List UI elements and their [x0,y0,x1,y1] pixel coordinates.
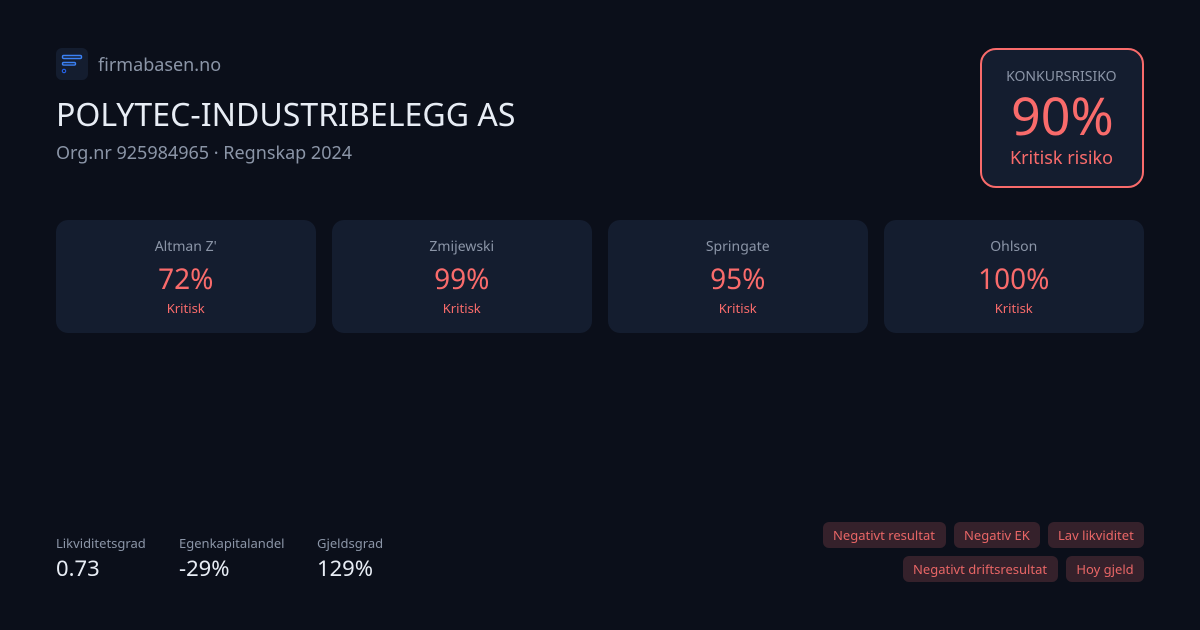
panel: Zmijewski: Zmijewski [429,237,494,256]
tag: Negativt driftsresultat: Negativt driftsresultat [913,560,1047,578]
panel: Ohlson: Kritisk [995,299,1033,317]
panel: Altman Z': 72% [158,260,213,298]
metric: Egenkapitalandel: -29% [179,553,230,583]
metric: Gjeldsgrad: 129% [317,553,373,583]
risk level: Kritisk risiko [1010,146,1113,170]
panel: Altman Z': Altman Z' [155,237,217,256]
tag: Negativ EK [954,522,1040,548]
tag: Negativt resultat [823,522,946,548]
panel: Altman Z' [56,220,316,333]
tag: Hoy gjeld [1066,556,1144,582]
metric: Egenkapitalandel [179,534,285,583]
tag: Negativ EK: Negativ EK [964,526,1030,544]
metric: Likviditetsgrad: Likviditetsgrad [56,534,146,552]
risk label: KONKURSRISIKO [1006,67,1117,86]
panel: Ohlson: Ohlson [990,237,1037,256]
metric: Gjeldsgrad: Gjeldsgrad [317,534,383,552]
panel: overall risk [980,48,1144,188]
panel: Springate: 95% [710,260,765,298]
panel: Springate: Kritisk [719,299,757,317]
tag: Negativt resultat: Negativt resultat [833,526,935,544]
tag: Lav likviditet: Lav likviditet [1058,526,1134,544]
brand name: firmabasen.no [98,53,221,77]
tag: Negativt driftsresultat [903,556,1058,582]
panel: Zmijewski: Kritisk [443,299,481,317]
logo icon [56,48,88,80]
panel: Springate [608,220,868,333]
tag: Hoy gjeld: Hoy gjeld [1076,560,1134,578]
metric: Likviditetsgrad: 0.73 [56,553,100,583]
panel: Altman Z': Kritisk [167,299,205,317]
metric: Gjeldsgrad [317,534,383,583]
title: POLYTEC-INDUSTRIBELEGG AS [56,93,516,136]
tag: Lav likviditet [1048,522,1144,548]
panel: Ohlson [884,220,1144,333]
metric: Egenkapitalandel: Egenkapitalandel [179,534,285,552]
risk value: 90% [1011,80,1114,151]
subtitle: Org.nr 925984965 · Regnskap 2024 [56,141,352,165]
metric: Likviditetsgrad [56,534,146,583]
panel: Springate: Springate [706,237,770,256]
panel: Zmijewski: 99% [434,260,489,298]
panel: Ohlson: 100% [978,260,1049,298]
panel: Zmijewski [332,220,592,333]
